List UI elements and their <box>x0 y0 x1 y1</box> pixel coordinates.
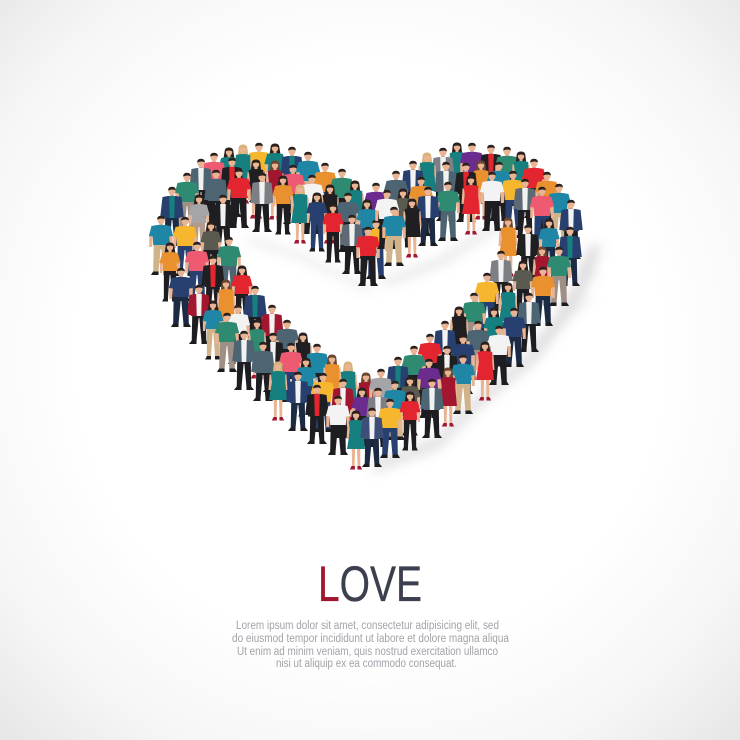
crowd: upper right lobe of heart <box>375 142 583 352</box>
crowd: lower left edge of heart <box>202 300 376 470</box>
body text: do eiusmod tempor incididunt ut labore et dolore magna aliqua <box>232 633 510 645</box>
body text <box>232 620 510 670</box>
body text: nisi ut aliquip ex ea commodo consequat. <box>276 658 457 670</box>
title: LOVE <box>318 556 422 612</box>
body text: Lorem ipsum dolor sit amet, consectetur adipisicing elit, sed <box>236 620 499 632</box>
crowd: lower right edge of heart <box>360 306 526 467</box>
body text: Ut enim ad minim veniam, quis nostrud exercitation ullamco <box>237 646 498 658</box>
crowd: upper left lobe of heart <box>149 143 388 345</box>
heart cast shadow <box>250 220 600 466</box>
